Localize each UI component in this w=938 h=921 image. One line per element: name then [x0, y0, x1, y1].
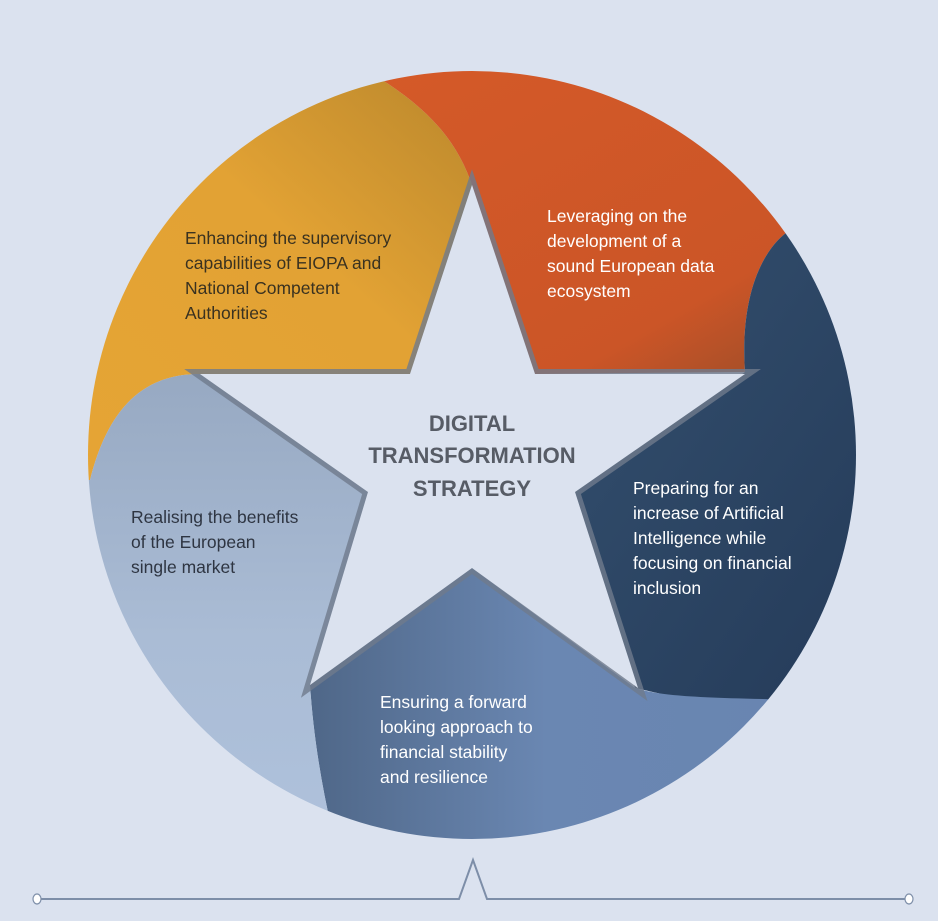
text: single market: single market	[131, 557, 235, 577]
text: supervisory capabilities	[185, 228, 391, 323]
star outline shadow	[200, 185, 745, 688]
title: digital transformation strategy: DIGITAL	[429, 411, 515, 436]
text: artificial intelligence: Preparing for an	[633, 478, 758, 498]
segment: financial stability (medium blue)	[310, 568, 768, 839]
bottom line with peak	[33, 860, 913, 904]
segment: single market (light blue)	[88, 374, 368, 811]
text: financial stability: and resilience	[380, 767, 488, 787]
title: digital transformation strategy	[368, 411, 576, 501]
text: data ecosystem: ecosystem	[547, 281, 631, 301]
text: supervisory capabilities: Authorities	[185, 303, 268, 323]
text: financial stability: Ensuring a forward	[380, 692, 527, 712]
panel: strategy wheel	[88, 71, 856, 839]
text: supervisory capabilities: capabilities of EIOPA and	[185, 253, 381, 273]
text: financial stability	[380, 692, 533, 787]
text: single market	[131, 507, 299, 577]
title: digital transformation strategy: TRANSFORMATION	[368, 443, 576, 468]
star center	[200, 185, 745, 688]
text: artificial intelligence: focusing on financial	[633, 553, 792, 573]
title: digital transformation strategy: STRATEGY	[413, 476, 531, 501]
text: financial stability: looking approach to	[380, 717, 533, 737]
segment: supervisory capabilities (yellow)	[88, 81, 472, 480]
text: supervisory capabilities: National Competent	[185, 278, 340, 298]
text: data ecosystem: development of a	[547, 231, 682, 251]
text: artificial intelligence: inclusion	[633, 578, 701, 598]
text: single market: Realising the benefits	[131, 507, 299, 527]
text: financial stability: financial stability	[380, 742, 508, 762]
segment: artificial intelligence (dark blue)	[575, 233, 856, 700]
text: data ecosystem: Leveraging on the	[547, 206, 687, 226]
text: artificial intelligence: increase of Artificial	[633, 503, 784, 523]
text: data ecosystem	[547, 206, 715, 301]
text: single market: of the European	[131, 532, 256, 552]
segment: data ecosystem (orange)	[384, 71, 786, 374]
text: artificial intelligence: Intelligence while	[633, 528, 766, 548]
text: supervisory capabilities: Enhancing the supervisory	[185, 228, 391, 248]
text: artificial intelligence	[633, 478, 792, 598]
text: data ecosystem: sound European data	[547, 256, 715, 276]
